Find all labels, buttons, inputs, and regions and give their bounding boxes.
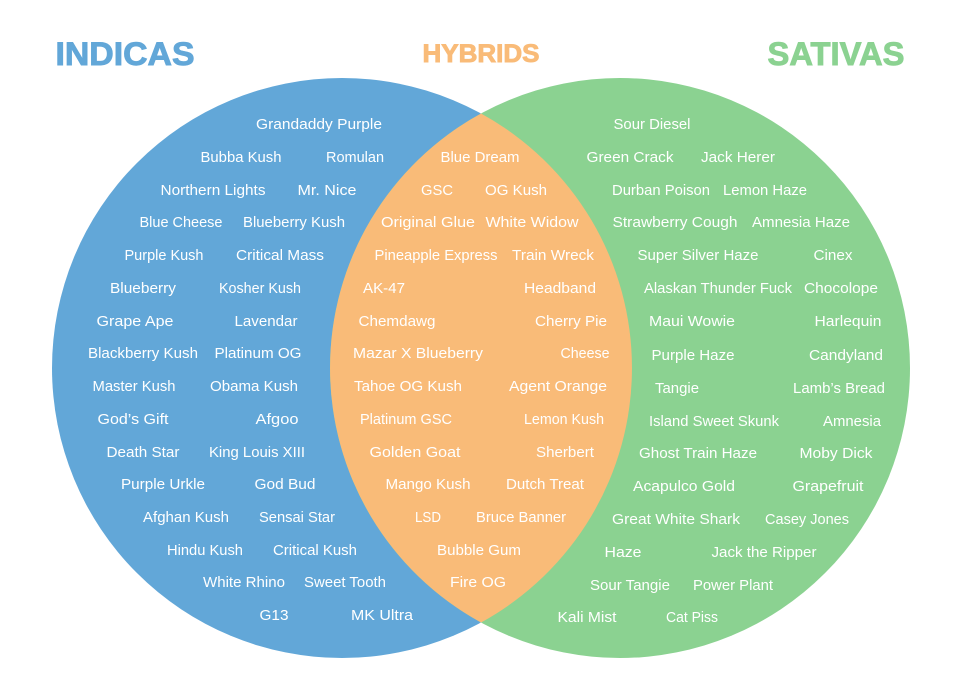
list: sativa strains: Cinex — [814, 247, 853, 264]
heading: Hybrids: HYBRIDS — [422, 40, 540, 68]
list: indica strains: Critical Kush — [273, 542, 357, 559]
list: indica strains: G13 — [260, 607, 288, 624]
list: sativa strains: Haze — [604, 544, 642, 561]
list: sativa strains: Chocolope — [804, 280, 878, 297]
list: sativa strains: Sour Tangie — [590, 577, 670, 594]
list: sativa strains: Island Sweet Skunk — [649, 413, 779, 430]
list: sativa strains: Green Crack — [586, 149, 674, 166]
list: hybrid strains: Agent Orange — [509, 378, 607, 395]
list: indica strains: Sensai Star — [259, 509, 335, 526]
list: sativa strains: Candyland — [809, 347, 883, 364]
list: hybrid strains: AK-47 — [363, 280, 405, 297]
heading: Indicas: INDICAS — [56, 36, 194, 72]
list: indica strains: Afghan Kush — [143, 509, 229, 526]
list: indica strains: Grandaddy Purple — [256, 116, 382, 133]
circle: sativas — [330, 78, 910, 658]
list: sativa strains: Durban Poison — [612, 182, 710, 199]
list: sativa strains: Jack the Ripper — [712, 544, 817, 561]
list: sativa strains: Amnesia — [823, 413, 882, 430]
list: hybrid strains — [353, 149, 610, 591]
list: sativa strains: Moby Dick — [800, 445, 873, 462]
list: sativa strains: Alaskan Thunder Fuck — [644, 280, 792, 297]
list: indica strains: Obama Kush — [210, 378, 298, 395]
list: sativa strains: Kali Mist — [558, 609, 617, 626]
list: sativa strains: Power Plant — [693, 577, 774, 594]
list: hybrid strains: Bubble Gum — [437, 542, 521, 559]
list: hybrid strains: Mango Kush — [386, 476, 470, 493]
list: sativa strains: Maui Wowie — [649, 313, 735, 330]
list: indica strains: Blue Cheese — [140, 214, 222, 231]
list: sativa strains: Casey Jones — [765, 511, 849, 528]
list: hybrid strains: Fire OG — [450, 574, 506, 591]
list: hybrid strains: Lemon Kush — [524, 411, 604, 428]
list: indica strains: Critical Mass — [236, 247, 324, 264]
list: hybrid strains: Bruce Banner — [476, 509, 566, 526]
list: sativa strains: Ghost Train Haze — [639, 445, 757, 462]
list: hybrid strains: GSC — [421, 182, 453, 199]
list: indica strains — [88, 116, 414, 624]
heading: Sativas: SATIVAS — [768, 36, 904, 72]
list: indica strains: Bubba Kush — [200, 149, 282, 166]
list: sativa strains: Super Silver Haze — [638, 247, 758, 264]
list: indica strains: Purple Urkle — [121, 476, 205, 493]
list: hybrid strains: Golden Goat — [370, 444, 461, 461]
overlap: hybrids — [330, 114, 632, 622]
list: hybrid strains: Headband — [524, 280, 596, 297]
list: sativa strains: Great White Shark — [612, 511, 741, 528]
list: hybrid strains: Chemdawg — [358, 313, 436, 330]
list: sativa strains: Cat Piss — [666, 609, 718, 626]
list: indica strains: Blueberry Kush — [243, 214, 345, 231]
list: hybrid strains: Cherry Pie — [535, 313, 607, 330]
list: sativa strains: Acapulco Gold — [633, 478, 735, 495]
list: hybrid strains: Platinum GSC — [360, 411, 452, 428]
list: hybrid strains: OG Kush — [485, 182, 547, 199]
list: indica strains: Afgoo — [256, 411, 298, 428]
list: sativa strains: Lemon Haze — [723, 182, 807, 199]
list: indica strains: Death Star — [106, 444, 180, 461]
list: hybrid strains: Original Glue — [381, 214, 475, 231]
list: indica strains: MK Ultra — [351, 607, 414, 624]
list: indica strains: Blueberry — [110, 280, 177, 297]
list: hybrid strains: Blue Dream — [440, 149, 520, 166]
list: sativa strains: Strawberry Cough — [612, 214, 738, 231]
list: hybrid strains: Mazar X Blueberry — [353, 345, 484, 362]
list: sativa strains: Amnesia Haze — [752, 214, 850, 231]
list: sativa strains: Tangie — [655, 380, 699, 397]
list: hybrid strains: Sherbert — [536, 444, 595, 461]
list: sativa strains: Sour Diesel — [614, 116, 690, 133]
list: indica strains: Purple Kush — [124, 247, 204, 264]
list: indica strains: Master Kush — [92, 378, 176, 395]
list: hybrid strains: Tahoe OG Kush — [354, 378, 462, 395]
list: indica strains: God’s Gift — [98, 411, 169, 428]
list: hybrid strains: Train Wreck — [512, 247, 595, 264]
list: indica strains: Hindu Kush — [167, 542, 243, 559]
list: indica strains: Platinum OG — [214, 345, 302, 362]
list: indica strains: White Rhino — [203, 574, 285, 591]
list: indica strains: Sweet Tooth — [304, 574, 386, 591]
list: hybrid strains: White Widow — [486, 214, 579, 231]
list: indica strains: Grape Ape — [96, 313, 174, 330]
list: indica strains: God Bud — [254, 476, 316, 493]
list: indica strains: Lavendar — [234, 313, 298, 330]
list: sativa strains: Purple Haze — [652, 347, 734, 364]
list: indica strains: Mr. Nice — [298, 182, 356, 199]
list: hybrid strains: Pineapple Express — [374, 247, 498, 264]
list: sativa strains: Jack Herer — [701, 149, 775, 166]
list: indica strains: Northern Lights — [160, 182, 266, 199]
list: indica strains: Kosher Kush — [219, 280, 301, 297]
list: indica strains: Blackberry Kush — [88, 345, 198, 362]
list: sativa strains — [558, 116, 885, 626]
list: hybrid strains: Dutch Treat — [506, 476, 585, 493]
list: indica strains: King Louis XIII — [209, 444, 305, 461]
list: hybrid strains: LSD — [415, 509, 441, 526]
list: sativa strains: Harlequin — [814, 313, 882, 330]
circle: indicas — [52, 78, 632, 658]
list: indica strains: Romulan — [326, 149, 384, 166]
list: hybrid strains: Cheese — [560, 345, 610, 362]
list: sativa strains: Lamb’s Bread — [793, 380, 885, 397]
list: sativa strains: Grapefruit — [792, 478, 864, 495]
